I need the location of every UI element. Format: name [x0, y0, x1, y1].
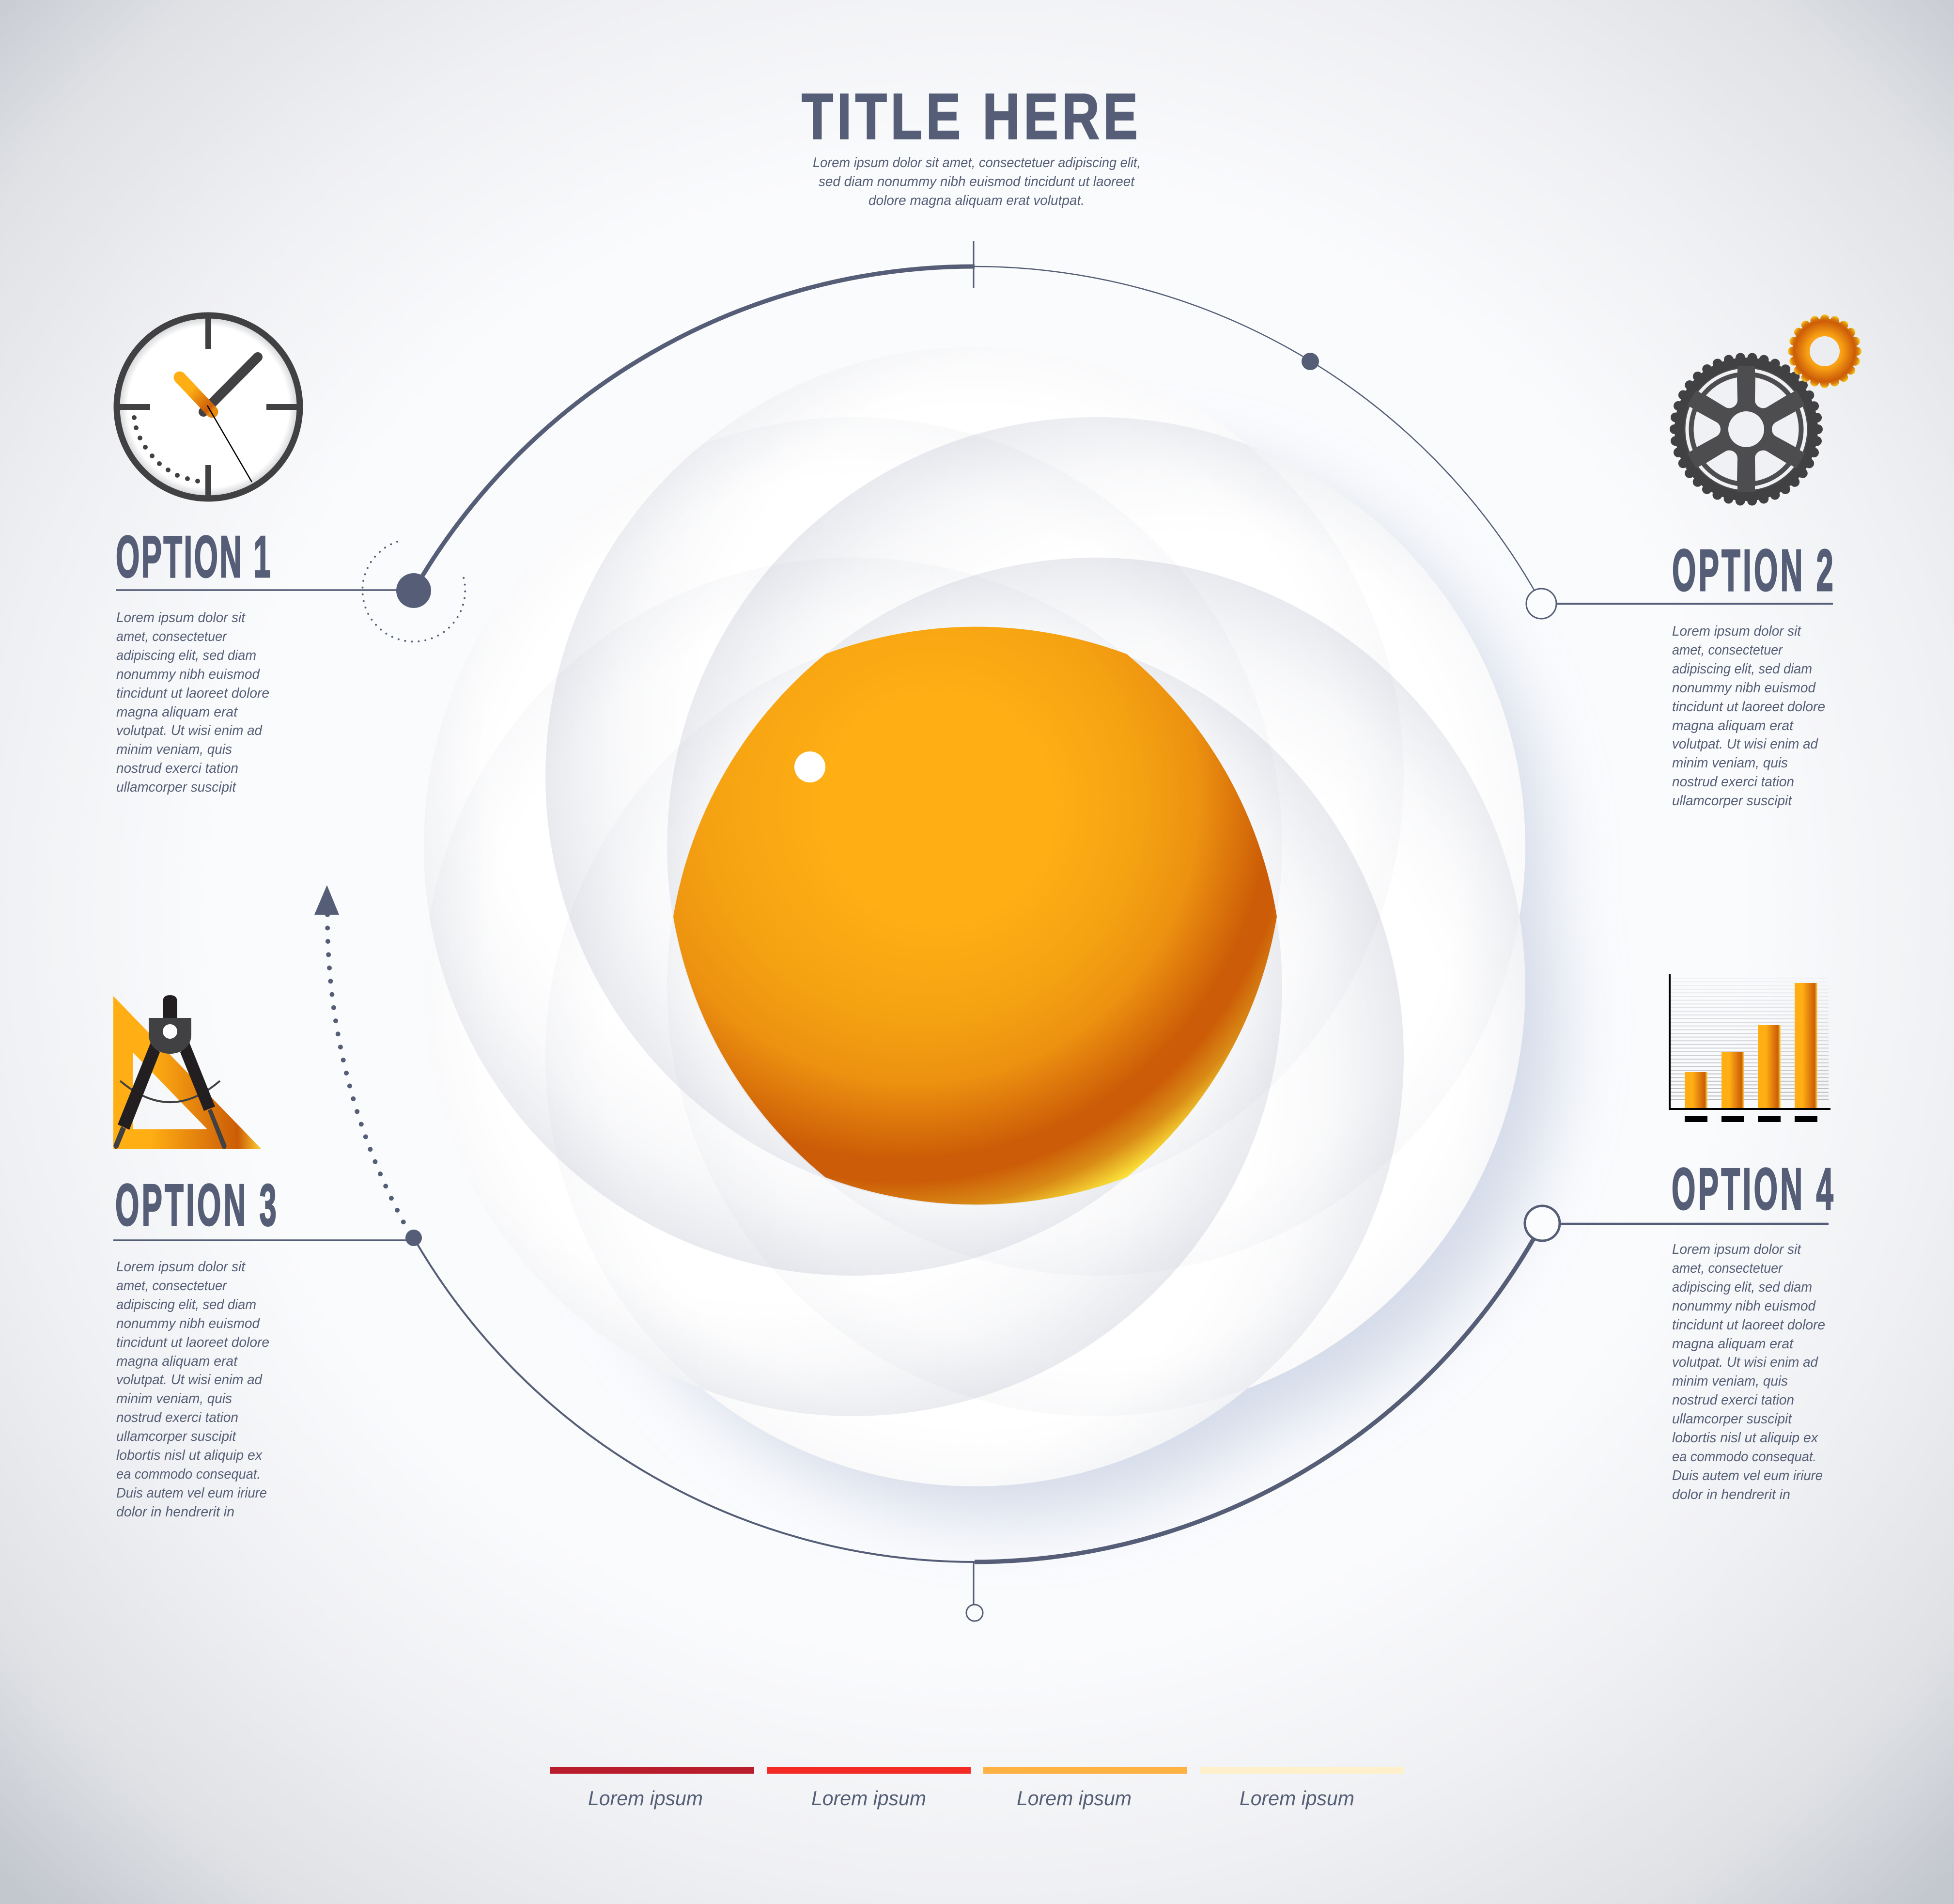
- subtitle: sed diam nonummy nibh euismod tincidunt ut laoreet: [819, 174, 1135, 189]
- option 2 node: [1526, 589, 1556, 619]
- chart gridlines: [1671, 978, 1829, 1100]
- option 4 text: volutpat. Ut wisi enim ad: [1672, 1355, 1818, 1370]
- subtitle: dolore magna aliquam erat volutpat.: [868, 193, 1085, 208]
- subtitle: Lorem ipsum dolor sit amet, consectetuer adipiscing elit,: [813, 155, 1141, 171]
- option 1 text: magna aliquam erat: [116, 704, 238, 720]
- option 1 text: nostrud exerci tation: [116, 761, 238, 776]
- top tick: [973, 241, 975, 288]
- orange yolk: [673, 627, 1277, 1204]
- option 4 text: dolor in hendrerit in: [1672, 1487, 1790, 1502]
- thick arc option 1 to top: [414, 266, 975, 591]
- legend item 1: [550, 1767, 754, 1810]
- option 1 text: ullamcorper suscipit: [116, 780, 237, 795]
- option 1 text: tincidunt ut laoreet dolore: [116, 686, 269, 701]
- option 1 text: minim veniam, quis: [116, 742, 232, 757]
- option 3 node: [405, 1230, 422, 1246]
- option 3 text: magna aliquam erat: [116, 1354, 238, 1369]
- dotted ring around option 1 node: [362, 542, 465, 641]
- option 3 text: lobortis nisl ut aliquip ex: [116, 1448, 263, 1463]
- petal edge shading: [267, 260, 1682, 1573]
- yolk highlight: [794, 751, 825, 782]
- option 2 text: tincidunt ut laoreet dolore: [1672, 699, 1825, 715]
- option 3 text: amet, consectetuer: [116, 1278, 227, 1294]
- option 4 text: ullamcorper suscipit: [1672, 1411, 1793, 1427]
- petal shadow: [581, 455, 1560, 1516]
- big gear: [1675, 358, 1818, 501]
- icon: clock: [117, 315, 300, 499]
- option 3 text: ea commodo consequat.: [116, 1467, 261, 1482]
- option 1 rule: [116, 589, 402, 591]
- option 1 text: [116, 610, 269, 795]
- thin arc option 3 to bottom: [414, 1238, 975, 1562]
- icon: gears: [1675, 319, 1857, 501]
- option 3 text: volutpat. Ut wisi enim ad: [116, 1372, 263, 1388]
- option 3 text: minim veniam, quis: [116, 1391, 232, 1406]
- option 3 text: adipiscing elit, sed diam: [116, 1297, 256, 1312]
- option 1 text: nonummy nibh euismod: [116, 667, 260, 682]
- option 4 text: adipiscing elit, sed diam: [1672, 1280, 1812, 1295]
- option 4 text: tincidunt ut laoreet dolore: [1672, 1317, 1825, 1333]
- option 4 text: Lorem ipsum dolor sit: [1672, 1242, 1802, 1257]
- subtitle: [813, 155, 1141, 208]
- option 1 text: Lorem ipsum dolor sit: [116, 610, 246, 625]
- legend: [550, 1767, 1404, 1810]
- node on thin arc: [1302, 353, 1319, 370]
- option 4 text: nonummy nibh euismod: [1672, 1298, 1816, 1314]
- option 3 text: Duis autem vel eum iriure: [116, 1485, 267, 1501]
- option 3 text: dolor in hendrerit in: [116, 1504, 234, 1520]
- option 4 text: minim veniam, quis: [1672, 1373, 1788, 1389]
- option 4 text: magna aliquam erat: [1672, 1336, 1794, 1352]
- option 3 text: tincidunt ut laoreet dolore: [116, 1335, 269, 1350]
- legend item 2: [767, 1767, 971, 1810]
- option 2 heading: OPTION 2: [1672, 537, 1833, 603]
- chart labels: [1685, 1116, 1817, 1122]
- option 3 text: Lorem ipsum dolor sit: [116, 1259, 246, 1275]
- option 3 rule: [113, 1239, 407, 1241]
- option 4 rule: [1560, 1223, 1829, 1225]
- option 3 text: [116, 1259, 269, 1520]
- thick arc option 4 to bottom: [975, 1223, 1542, 1562]
- option 1: [116, 524, 431, 795]
- small orange gear: [1792, 319, 1857, 384]
- option 2 text: volutpat. Ut wisi enim ad: [1672, 736, 1818, 752]
- legend item 4: Lorem ipsum: [1240, 1787, 1354, 1810]
- option 4: [1525, 1156, 1833, 1502]
- petal base: [424, 347, 1525, 1486]
- option 4 text: amet, consectetuer: [1672, 1261, 1783, 1276]
- legend item 1: Lorem ipsum: [588, 1787, 703, 1810]
- option 4 node: [1525, 1206, 1560, 1241]
- option 3: [113, 1172, 422, 1520]
- option 4 text: lobortis nisl ut aliquip ex: [1672, 1430, 1818, 1446]
- option 3 heading: OPTION 3: [115, 1172, 277, 1238]
- option 1 text: adipiscing elit, sed diam: [116, 648, 256, 663]
- option 4 heading: OPTION 4: [1672, 1156, 1833, 1222]
- option 1 text: volutpat. Ut wisi enim ad: [116, 723, 263, 738]
- option 2 text: nonummy nibh euismod: [1672, 680, 1816, 696]
- option 2 text: minim veniam, quis: [1672, 755, 1788, 771]
- option 3 text: ullamcorper suscipit: [116, 1429, 237, 1444]
- legend item 3: Lorem ipsum: [1017, 1787, 1132, 1810]
- legend item 2: Lorem ipsum: [811, 1787, 926, 1810]
- option 2 text: [1672, 624, 1825, 809]
- dotted arrow path: [327, 915, 406, 1227]
- option 2 text: amet, consectetuer: [1672, 642, 1783, 658]
- option 2 text: magna aliquam erat: [1672, 718, 1794, 734]
- bottom tick: [973, 1562, 975, 1605]
- option 4 text: [1672, 1242, 1825, 1502]
- thin arc top to option 2: [975, 266, 1542, 604]
- petal overlays: [267, 260, 1682, 1573]
- petal flower: [267, 260, 1682, 1573]
- option 4 text: ea commodo consequat.: [1672, 1449, 1816, 1465]
- option 2 text: Lorem ipsum dolor sit: [1672, 624, 1802, 639]
- title: TITLE HERE: [802, 80, 1138, 153]
- option 1 text: amet, consectetuer: [116, 629, 227, 644]
- arrow head: [314, 885, 339, 915]
- option 3 text: nostrud exerci tation: [116, 1410, 238, 1425]
- main ring: [327, 241, 1542, 1605]
- option 2 text: ullamcorper suscipit: [1672, 793, 1793, 809]
- bar chart icon: [1670, 974, 1830, 1122]
- legend item 4: [1200, 1767, 1404, 1810]
- option 4 text: Duis autem vel eum iriure: [1672, 1468, 1823, 1483]
- option 1 heading: OPTION 1: [116, 524, 271, 590]
- option 4 text: nostrud exerci tation: [1672, 1392, 1794, 1408]
- option 2: [1526, 537, 1833, 809]
- option 2 rule: [1556, 603, 1833, 605]
- option 2 text: nostrud exerci tation: [1672, 774, 1794, 790]
- option 3 text: nonummy nibh euismod: [116, 1316, 260, 1331]
- option 1 node: [396, 573, 431, 608]
- bottom node: [966, 1605, 983, 1621]
- chart axes: [1670, 974, 1830, 1109]
- chart bars: [1685, 983, 1817, 1108]
- icon: set square and compass: [113, 995, 262, 1149]
- option 2 text: adipiscing elit, sed diam: [1672, 661, 1812, 677]
- legend item 3: [983, 1767, 1187, 1810]
